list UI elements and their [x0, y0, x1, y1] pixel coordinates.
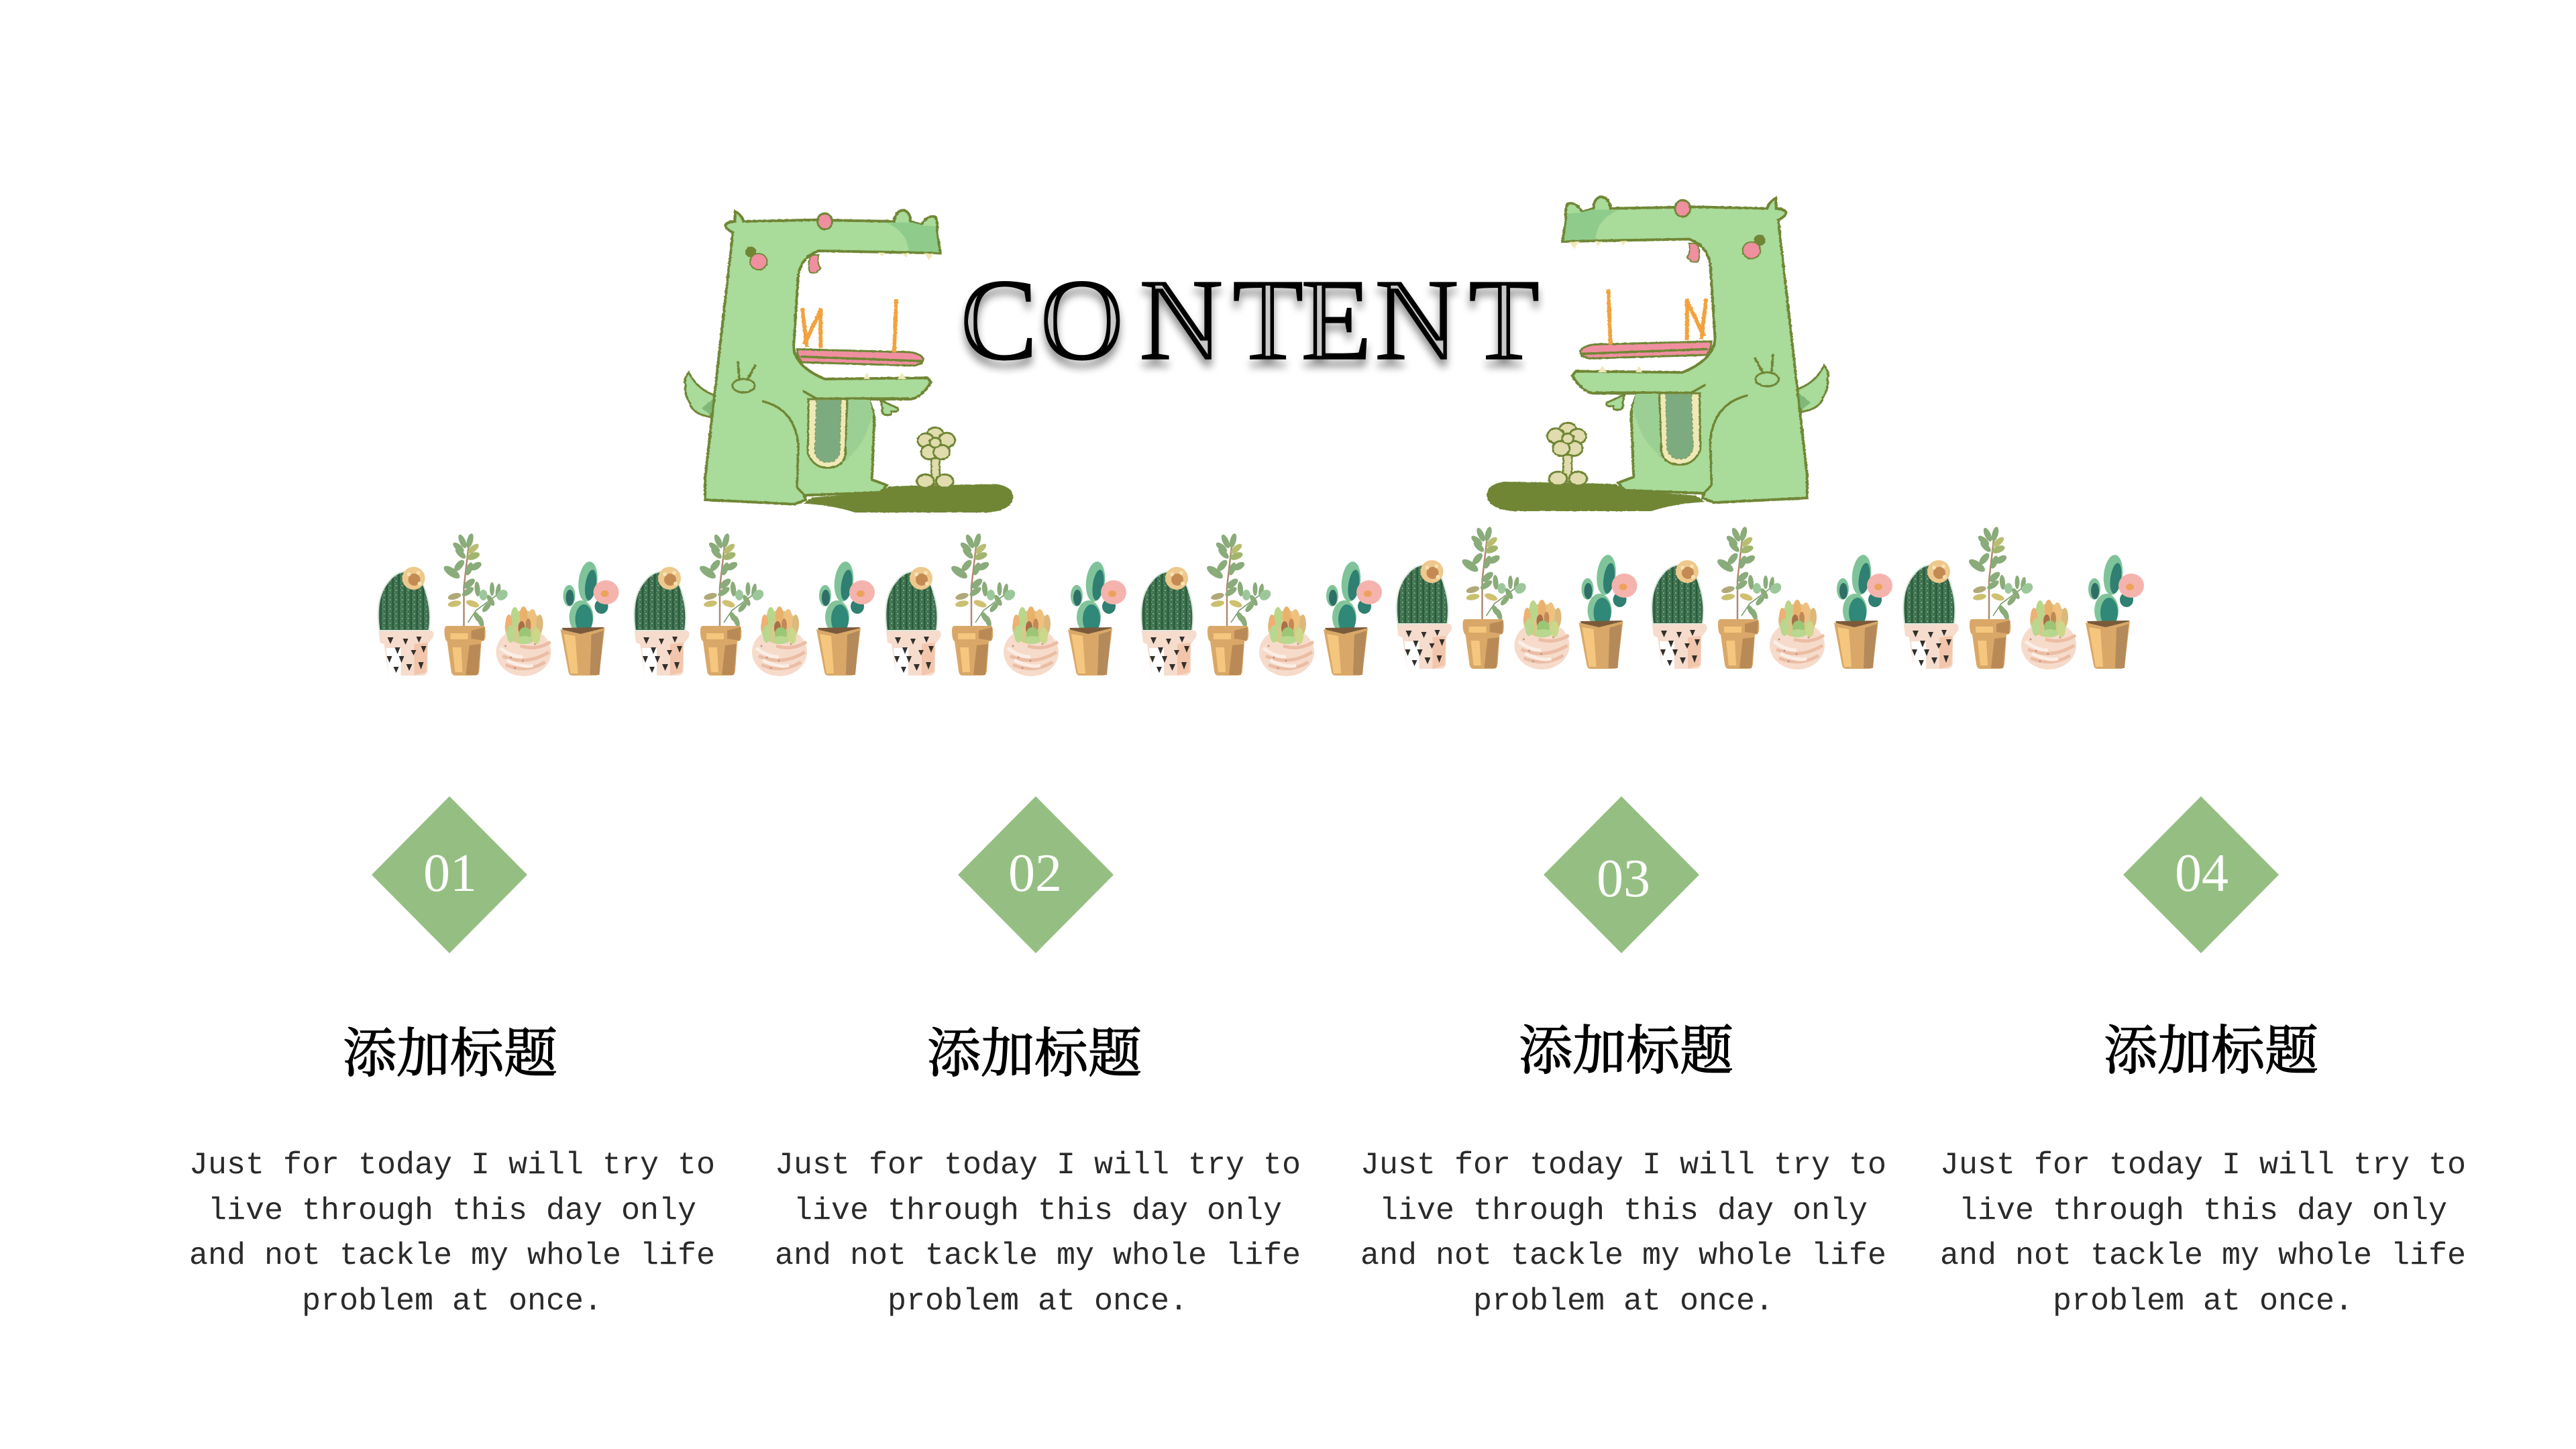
heading 03: 添加标题	[1519, 1022, 1733, 1081]
body text 03: problem at once.	[1473, 1284, 1774, 1320]
icon: potted plants group 6	[1652, 526, 1892, 669]
number badge 01: 01	[423, 844, 477, 903]
body text 03: Just for today I will try to	[1360, 1148, 1886, 1183]
body text 02: live through this day only	[794, 1193, 1282, 1229]
heading 04: 添加标题	[2104, 1022, 2318, 1081]
number badge 02	[958, 796, 1114, 953]
body text 02: Just for today I will try to	[775, 1148, 1301, 1183]
right crocodile illustration	[1487, 197, 1828, 511]
body text 01: Just for today I will try to	[189, 1148, 715, 1183]
number badge 04	[2123, 796, 2279, 953]
icon: potted plants group 4	[1141, 533, 1382, 676]
number badge 04: 04	[2175, 844, 2229, 903]
panel: item 03	[0, 0, 1980, 1320]
body text 04: problem at once.	[2053, 1284, 2353, 1320]
panel: item 02	[0, 0, 1395, 1320]
number badge 01	[372, 796, 527, 953]
icon: potted plants group 1	[378, 533, 619, 676]
icon: potted plants group 3	[885, 533, 1126, 676]
icon: potted plants group 5	[1397, 526, 1637, 669]
number badge 03: 03	[1597, 849, 1650, 908]
body text 03: live through this day only	[1379, 1193, 1868, 1229]
body text 04: and not tackle my whole life	[1940, 1238, 2466, 1274]
body text 01: problem at once.	[302, 1284, 602, 1320]
body text 02: problem at once.	[888, 1284, 1188, 1320]
left crocodile illustration	[685, 210, 1013, 513]
heading 02: 添加标题	[927, 1025, 1142, 1084]
body text 02: and not tackle my whole life	[775, 1238, 1301, 1274]
panel: item 01	[0, 0, 809, 1320]
body text 04: Just for today I will try to	[1940, 1148, 2466, 1183]
heading 01: 添加标题	[343, 1025, 557, 1084]
title: CONTENT	[960, 255, 1540, 384]
cactus row	[378, 526, 2144, 676]
number badge 02: 02	[1008, 844, 1062, 903]
body text 01: and not tackle my whole life	[189, 1238, 715, 1274]
icon: potted plants group 2	[634, 533, 875, 676]
number badge 03	[1544, 796, 1699, 953]
body text 04: live through this day only	[1959, 1193, 2447, 1229]
body text 01: live through this day only	[208, 1193, 696, 1229]
icon: potted plants group 7	[1903, 526, 2144, 669]
body text 03: and not tackle my whole life	[1360, 1238, 1886, 1274]
